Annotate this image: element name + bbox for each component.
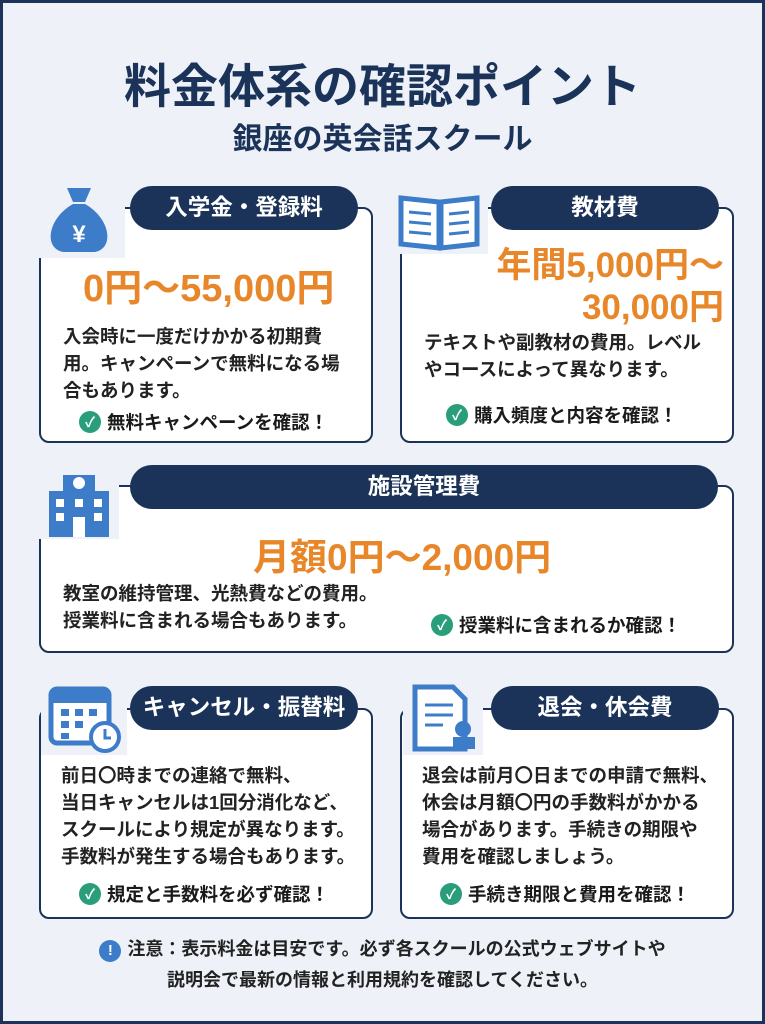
check: ✓ [437, 617, 447, 633]
check: ✓ [452, 407, 462, 423]
pill: facility: 施設管理費 [368, 474, 480, 499]
footer note [99, 939, 666, 990]
description [424, 332, 701, 380]
pill: withdrawal: 退会・休会費 [537, 695, 672, 720]
description: 休会は月額〇円の手数料がかかる [422, 792, 700, 813]
check: ✓ [85, 886, 95, 902]
title: 料金体系の確認ポイント [124, 60, 641, 113]
price: 年間5,000円〜 [496, 246, 724, 285]
check: 無料キャンペーンを確認！ [107, 412, 328, 433]
panel: entrance fee [39, 207, 373, 443]
description: 合もあります。 [63, 380, 191, 401]
description [61, 765, 355, 867]
description: 費用を確認しましょう。 [422, 846, 624, 867]
check: 購入頻度と内容を確認！ [474, 405, 678, 426]
pill: cancel: キャンセル・振替料 [143, 695, 345, 720]
price [496, 246, 724, 327]
description: 退会は前月〇日までの申請で無料、 [422, 765, 718, 786]
footer note: 説明会で最新の情報と利用規約を確認してください。 [167, 970, 598, 990]
description: 場合があります。手続きの期限や [422, 819, 698, 840]
icon: money bag [33, 178, 125, 258]
description [422, 765, 718, 867]
pill: withdrawal [491, 686, 719, 730]
check: ✓ [85, 414, 95, 430]
description [63, 583, 378, 631]
pill: facility [130, 465, 718, 509]
footer note: ! [108, 942, 113, 959]
description: 当日キャンセルは1回分消化など、 [61, 792, 348, 813]
description: スクールにより規定が異なります。 [61, 819, 355, 840]
description: 授業料に含まれる場合もあります。 [63, 610, 357, 631]
icon: calendar [41, 681, 127, 755]
icon: building [39, 463, 119, 539]
check: ✓ [446, 886, 456, 902]
icon: money bag: ¥ [72, 221, 86, 248]
panel: withdrawal [400, 708, 734, 919]
description: 入会時に一度だけかかる初期費 [63, 326, 322, 347]
description [63, 326, 340, 401]
icon: document [403, 681, 483, 755]
check: 手続き期限と費用を確認！ [468, 884, 690, 905]
pill: materials [491, 186, 719, 230]
check: 規定と手数料を必ず確認！ [107, 884, 329, 905]
check: 授業料に含まれるか確認！ [459, 615, 681, 636]
pill: entrance: 入学金・登録料 [165, 195, 323, 220]
pill: materials: 教材費 [571, 195, 639, 220]
description: 手数料が発生する場合もあります。 [61, 846, 355, 867]
price: 30,000円 [582, 288, 724, 327]
panel: materials [400, 207, 734, 443]
subtitle: 銀座の英会話スクール [232, 123, 532, 156]
pill: cancel [130, 686, 358, 730]
description: 前日〇時までの連絡で無料、 [61, 765, 302, 786]
description: やコースによって異なります。 [424, 359, 679, 380]
description: 教室の維持管理、光熱費などの費用。 [63, 583, 378, 604]
price: 0円〜55,000円 [83, 268, 334, 310]
footer note: 注意：表示料金は目安です。必ず各スクールの公式ウェブサイトや [127, 939, 666, 959]
icon: book [393, 188, 488, 254]
panel: facility [39, 485, 734, 653]
panel: cancel [39, 708, 373, 919]
description: 用。キャンペーンで無料になる場 [63, 353, 340, 374]
price: 月額0円〜2,000円 [253, 537, 551, 578]
description: テキストや副教材の費用。レベル [424, 332, 701, 353]
pill: entrance [130, 186, 358, 230]
